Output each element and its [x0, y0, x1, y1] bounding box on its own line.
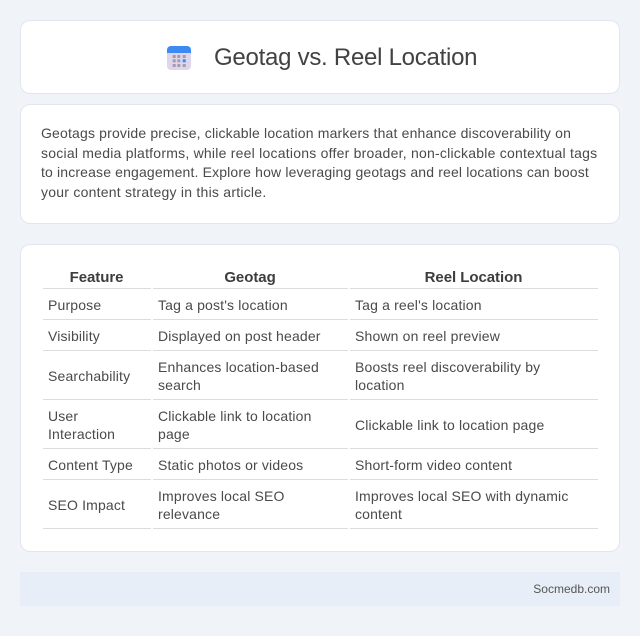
row: Searchability	[48, 359, 540, 393]
row: Purpose: Tag a post's location	[158, 297, 288, 313]
row: User Interaction: Clickable link to location	[158, 408, 312, 424]
row: Content Type: Content Type	[48, 457, 133, 473]
row: Searchability: search	[158, 377, 201, 393]
text block: introduction	[41, 125, 597, 200]
row: User Interaction	[48, 408, 544, 442]
row: Visibility: Visibility	[48, 328, 100, 344]
row: Content Type	[48, 457, 512, 473]
row: Content Type: Short-form video content	[355, 457, 512, 473]
text block: introduction: Geotags provide precise, clickable location markers that enhance discoverability on	[41, 125, 571, 141]
row: Visibility: Shown on reel preview	[355, 328, 500, 344]
row: Searchability: Enhances location-based	[158, 359, 319, 375]
row: Content Type: Static photos or videos	[158, 457, 303, 473]
row: Purpose: Purpose	[48, 297, 101, 313]
row: User Interaction: page	[158, 426, 190, 442]
footer bar	[20, 572, 620, 606]
panel: comparison table	[20, 244, 620, 552]
row: Purpose: Tag a reel's location	[355, 297, 482, 313]
text block: introduction: social media platforms, while reel locations offer broader, non-clickable contextual tags	[41, 144, 597, 160]
row: Searchability: location	[355, 377, 405, 393]
table header: Geotag	[224, 269, 276, 286]
row: Visibility	[48, 328, 500, 344]
icon: calendar	[167, 46, 191, 70]
footer credit: Socmedb.com	[533, 582, 610, 596]
row: SEO Impact	[48, 488, 568, 522]
row: User Interaction: Clickable link to location page	[355, 417, 544, 433]
table header: Feature	[70, 269, 123, 286]
table header: Reel Location	[425, 269, 522, 286]
row: SEO Impact: SEO Impact	[48, 497, 125, 513]
row: SEO Impact: Improves local SEO with dynamic	[355, 488, 568, 504]
panel: title card	[20, 20, 620, 94]
row: SEO Impact: relevance	[158, 506, 220, 522]
row: User Interaction: Interaction	[48, 426, 115, 442]
row: Searchability: Searchability	[48, 368, 130, 384]
row: Visibility: Displayed on post header	[158, 328, 321, 344]
title: Geotag vs. Reel Location	[214, 44, 477, 71]
text block: introduction: to increase engagement. Explore how leveraging geotags and reel locations can boost	[41, 164, 589, 180]
row: Purpose	[48, 297, 482, 313]
table header	[70, 269, 522, 286]
row: SEO Impact: Improves local SEO	[158, 488, 285, 504]
text block: introduction: your content strategy in this article.	[41, 184, 266, 200]
row: SEO Impact: content	[355, 506, 402, 522]
row: User Interaction: User	[48, 408, 78, 424]
panel: introduction	[20, 104, 620, 224]
row: Searchability: Boosts reel discoverability by	[355, 359, 540, 375]
